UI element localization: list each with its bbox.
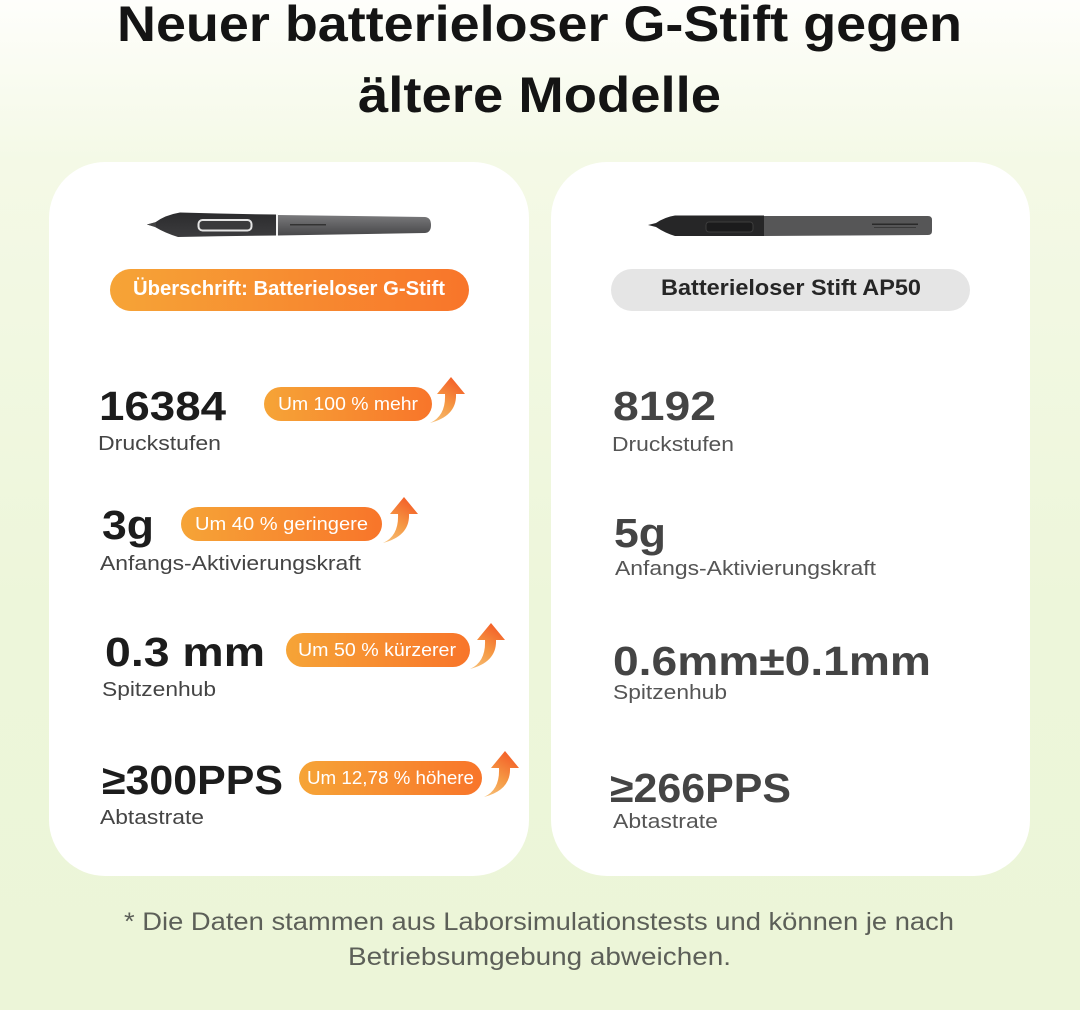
stat: 0.6mm Spitzenhub (613, 638, 931, 704)
footnote (124, 908, 954, 971)
title (117, 0, 962, 123)
arrow up (484, 751, 519, 797)
badge: Um 12,78 % höhere: Um 12,78 % höhere (307, 768, 474, 788)
footnote: * Die Daten stammen aus Laborsimulationstests und können je nach (124, 908, 954, 936)
arrow up (430, 377, 465, 423)
stat: 0.3 mm Spitzenhub: 0.3 mm (105, 629, 265, 675)
arrow up (383, 497, 418, 543)
label: AP50 pill (611, 269, 970, 311)
footnote: Betriebsumgebung abweichen. (348, 943, 731, 971)
badge: Um 100 % mehr (264, 387, 432, 421)
stat: 266PPS Abtastrate (610, 765, 791, 833)
stat: 266PPS Abtastrate: Abtastrate (613, 811, 718, 833)
icon: G-Stift pen (147, 212, 431, 237)
badge: Um 40 % geringere (181, 507, 382, 541)
stat: 3g Anfangs-Aktivierungskraft (100, 502, 361, 575)
stat: 300PPS Abtastrate: Abtastrate (100, 807, 204, 829)
stat: 3g Anfangs-Aktivierungskraft: Anfangs-Aktivierungskraft (100, 553, 361, 575)
stat: 266PPS Abtastrate: ≥266PPS (610, 765, 791, 811)
panel: Batterieloser G-Stift (49, 162, 529, 876)
stat: 5g Anfangs-Aktivierungskraft: Anfangs-Aktivierungskraft (615, 558, 876, 580)
stat: 3g Anfangs-Aktivierungskraft: 3g (102, 502, 154, 548)
panel: Batterieloser Stift AP50 (551, 162, 1030, 876)
arrow up (470, 623, 505, 669)
stat: 8192 Druckstufen: Druckstufen (612, 434, 734, 456)
stat: 300PPS Abtastrate (100, 757, 283, 829)
stat: 8192 Druckstufen (612, 383, 734, 456)
label: AP50 pill: Batterieloser Stift AP50 (661, 275, 921, 300)
title: ältere Modelle (358, 67, 721, 123)
label: G-Stift pill (110, 269, 469, 311)
icon: AP50 pen (648, 216, 932, 236)
stat: 16384 Druckstufen: Druckstufen (98, 433, 221, 455)
stat: 16384 Druckstufen (98, 383, 226, 455)
badge: Um 50 % kürzerer: Um 50 % kürzerer (298, 640, 456, 660)
stat: 16384 Druckstufen: 16384 (99, 383, 226, 429)
stat: 300PPS Abtastrate: ≥300PPS (102, 757, 283, 803)
stat: 0.6mm Spitzenhub: 0.6mm±0.1mm (613, 638, 931, 684)
stat: 5g Anfangs-Aktivierungskraft: 5g (614, 510, 666, 556)
badge: Um 12,78 % höhere (299, 761, 482, 795)
stat: 0.3 mm Spitzenhub (102, 629, 265, 701)
stat: 0.3 mm Spitzenhub: Spitzenhub (102, 679, 216, 701)
stat: 8192 Druckstufen: 8192 (613, 383, 716, 429)
stat: 5g Anfangs-Aktivierungskraft (614, 510, 876, 580)
badge: Um 40 % geringere: Um 40 % geringere (195, 514, 368, 534)
stat: 0.6mm Spitzenhub: Spitzenhub (613, 682, 727, 704)
badge: Um 50 % kürzerer (286, 633, 470, 667)
label: G-Stift pill: Überschrift: Batterieloser G-Stift (133, 277, 445, 300)
badge: Um 100 % mehr: Um 100 % mehr (278, 394, 418, 414)
